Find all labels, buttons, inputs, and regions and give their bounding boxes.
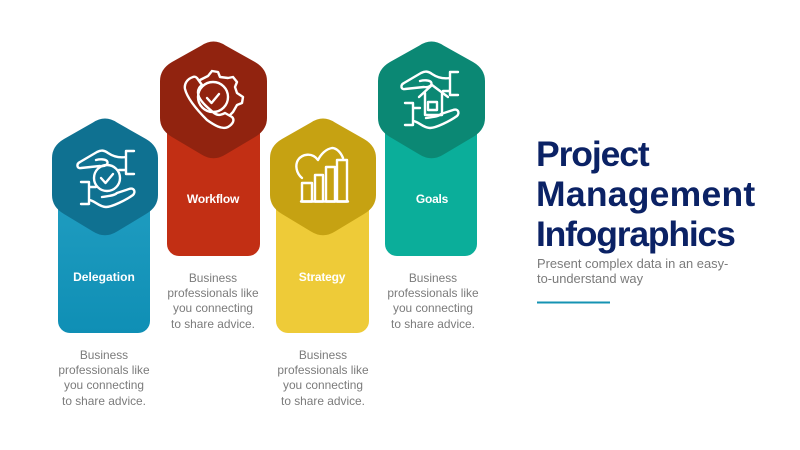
hexagon: delegation bbox=[52, 118, 158, 235]
icon: heart bar chart bbox=[296, 148, 348, 202]
text: delegation description: Business bbox=[80, 348, 128, 362]
title: Infographics bbox=[536, 214, 735, 254]
text: delegation description: professionals like bbox=[58, 363, 150, 377]
text: goals description: Business bbox=[409, 271, 457, 285]
text: strategy description bbox=[277, 348, 369, 408]
label: goals: Goals bbox=[416, 192, 448, 206]
text: strategy description: you connecting bbox=[283, 378, 363, 392]
text: goals description: you connecting bbox=[393, 301, 473, 315]
text: goals description: to share advice. bbox=[391, 317, 475, 331]
icon: hands with check bbox=[77, 151, 134, 207]
icon: hands with house bbox=[401, 72, 458, 128]
title: Management bbox=[536, 174, 756, 214]
text: goals description: professionals like bbox=[387, 286, 479, 300]
accent rule bbox=[537, 302, 610, 304]
text: strategy description: Business bbox=[299, 348, 347, 362]
text: strategy description: to share advice. bbox=[281, 394, 365, 408]
hexagon: goals bbox=[378, 42, 485, 158]
subtitle bbox=[537, 256, 728, 286]
text: delegation description: to share advice. bbox=[62, 394, 146, 408]
hexagon: strategy bbox=[270, 118, 376, 235]
text: workflow description: professionals like bbox=[167, 286, 259, 300]
label: strategy: Strategy bbox=[299, 270, 345, 284]
text: goals description bbox=[387, 271, 479, 331]
text: workflow description: you connecting bbox=[173, 301, 253, 315]
text: workflow description: Business bbox=[189, 271, 237, 285]
label: delegation: Delegation bbox=[73, 270, 135, 284]
hexagon: workflow bbox=[160, 42, 267, 158]
icon: phone with gear bbox=[185, 71, 243, 128]
text: workflow description bbox=[167, 271, 259, 331]
column: delegation bar bbox=[58, 200, 150, 333]
title: Project bbox=[536, 134, 649, 174]
text: delegation description: you connecting bbox=[64, 378, 144, 392]
column: strategy bar bbox=[276, 200, 369, 333]
title bbox=[536, 134, 756, 254]
subtitle: Present complex data in an easy- bbox=[537, 256, 728, 271]
column: workflow bar bbox=[167, 120, 260, 256]
text: strategy description: professionals like bbox=[277, 363, 369, 377]
label: workflow: Workflow bbox=[187, 192, 239, 206]
column: goals bar bbox=[385, 120, 477, 256]
text: delegation description bbox=[58, 348, 150, 408]
text: workflow description: to share advice. bbox=[171, 317, 255, 331]
subtitle: to-understand way bbox=[537, 270, 643, 286]
